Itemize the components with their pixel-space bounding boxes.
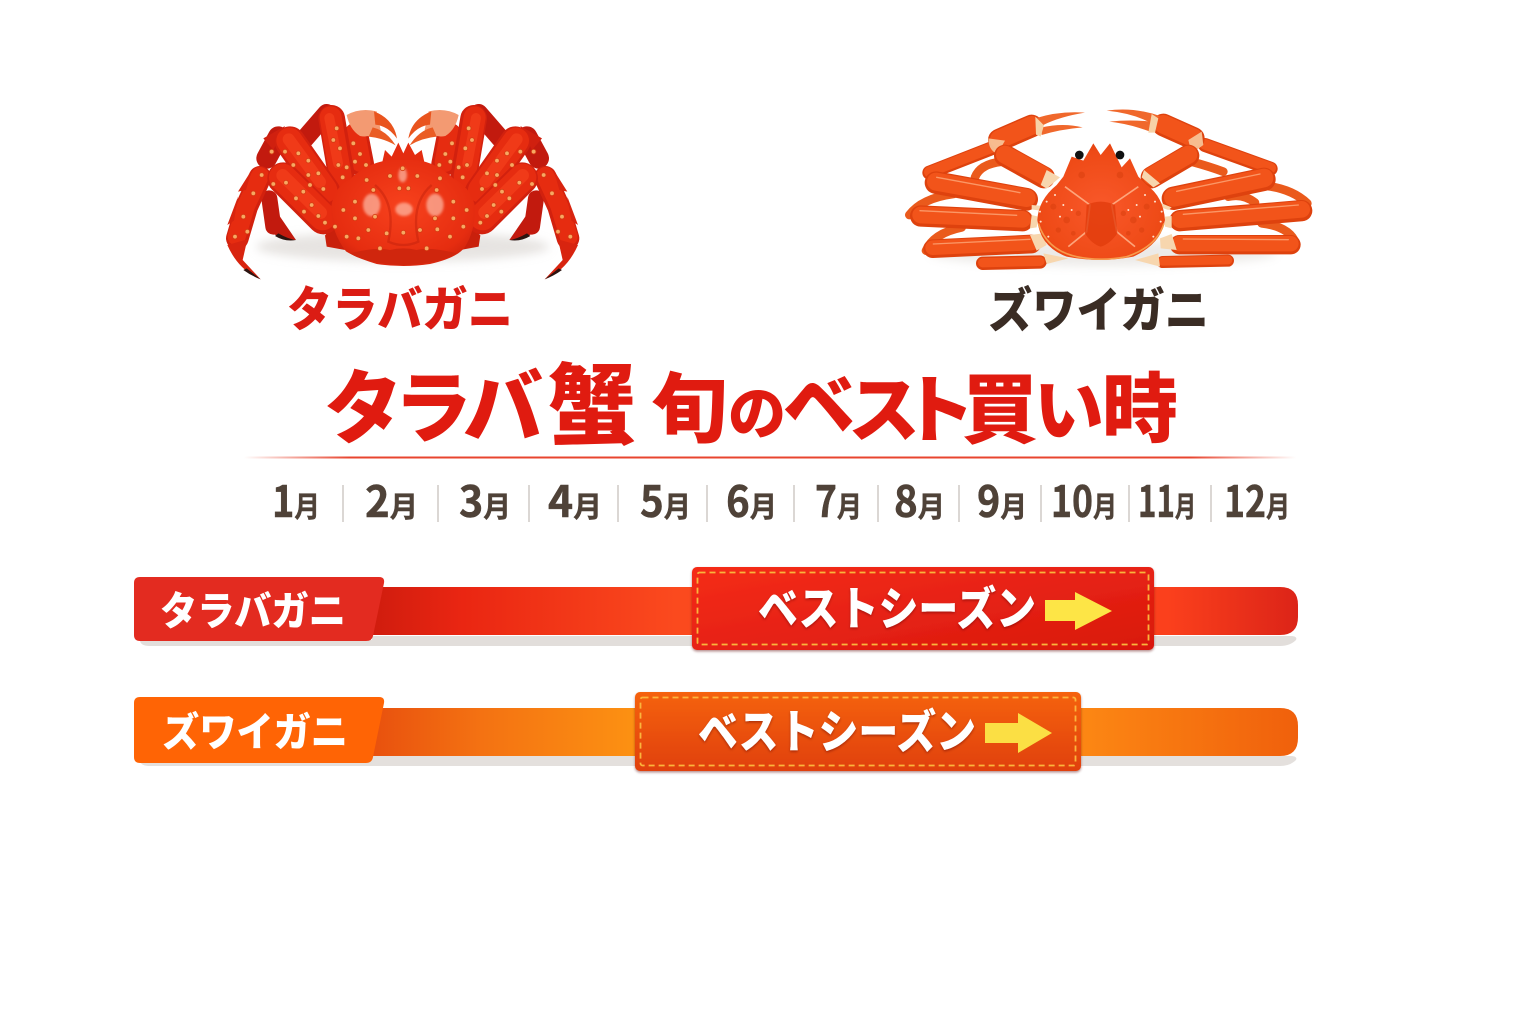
- title: 時: [1102, 348, 1178, 458]
- title: い: [1034, 355, 1104, 456]
- snow crab shadow: [930, 241, 1277, 266]
- month header: 10月: [1051, 468, 1117, 530]
- snow crab right arm: [1107, 109, 1271, 187]
- title: ベ: [783, 347, 855, 452]
- month header: 3月: [459, 468, 511, 530]
- crab ground shadow: [256, 232, 549, 262]
- month header: [272, 468, 1290, 530]
- row: snow crab season: [134, 692, 1298, 771]
- snow crab carapace: [1037, 143, 1165, 260]
- snow crab left walking legs: [920, 177, 1068, 264]
- title: タ: [320, 341, 408, 463]
- king crab name tag: タラバガニ: [160, 579, 346, 637]
- row: king crab season: [134, 567, 1298, 650]
- king crab bar shadow: [140, 636, 1296, 646]
- title: の: [728, 367, 786, 451]
- month header: 6月: [726, 468, 777, 530]
- arrow: [985, 713, 1052, 753]
- month header: 4月: [548, 468, 602, 530]
- snow crab illustration: [909, 109, 1307, 267]
- month header: 7月: [815, 468, 862, 530]
- title: [320, 336, 1178, 463]
- king crab best season badge: ベストシーズン: [758, 573, 1036, 639]
- snow crab bar shadow: [140, 756, 1296, 766]
- title: ス: [848, 352, 920, 457]
- month header: 9月: [977, 468, 1027, 530]
- label: king crab name: タラバガニ: [287, 270, 513, 340]
- title: バ: [463, 344, 543, 460]
- arrow: [1045, 592, 1112, 630]
- label: snow crab name: ズワイガニ: [988, 271, 1209, 341]
- snow crab name tag: ズワイガニ: [162, 700, 348, 758]
- king crab rostrum: [382, 143, 425, 173]
- snow crab best season badge: [635, 692, 1081, 771]
- king crab carapace: [331, 160, 475, 266]
- snow crab rear thin legs: [909, 162, 1307, 251]
- month header: 12月: [1224, 468, 1290, 530]
- snow crab year bar: [370, 708, 1298, 756]
- snow crab best season badge: ベストシーズン: [698, 696, 976, 762]
- month header: 11月: [1138, 468, 1196, 530]
- title underline: [244, 456, 1296, 458]
- king crab left legs: [227, 110, 397, 279]
- king crab illustration: [227, 110, 578, 279]
- month header: 5月: [640, 468, 691, 530]
- king crab right legs: [408, 110, 578, 279]
- snow crab right walking legs: [1135, 174, 1302, 267]
- title: 旬: [651, 348, 727, 458]
- king crab year bar: [370, 587, 1298, 635]
- title: 蟹: [548, 336, 636, 463]
- king crab best season badge: [692, 567, 1154, 650]
- snow crab left arm: [929, 112, 1085, 189]
- snow crab eyes: [1075, 151, 1124, 159]
- month header: 1月: [272, 468, 320, 530]
- title: ラ: [394, 347, 472, 459]
- title: ト: [901, 351, 975, 458]
- month header: 8月: [894, 468, 945, 530]
- title: 買: [962, 349, 1038, 459]
- month header: 2月: [365, 468, 418, 530]
